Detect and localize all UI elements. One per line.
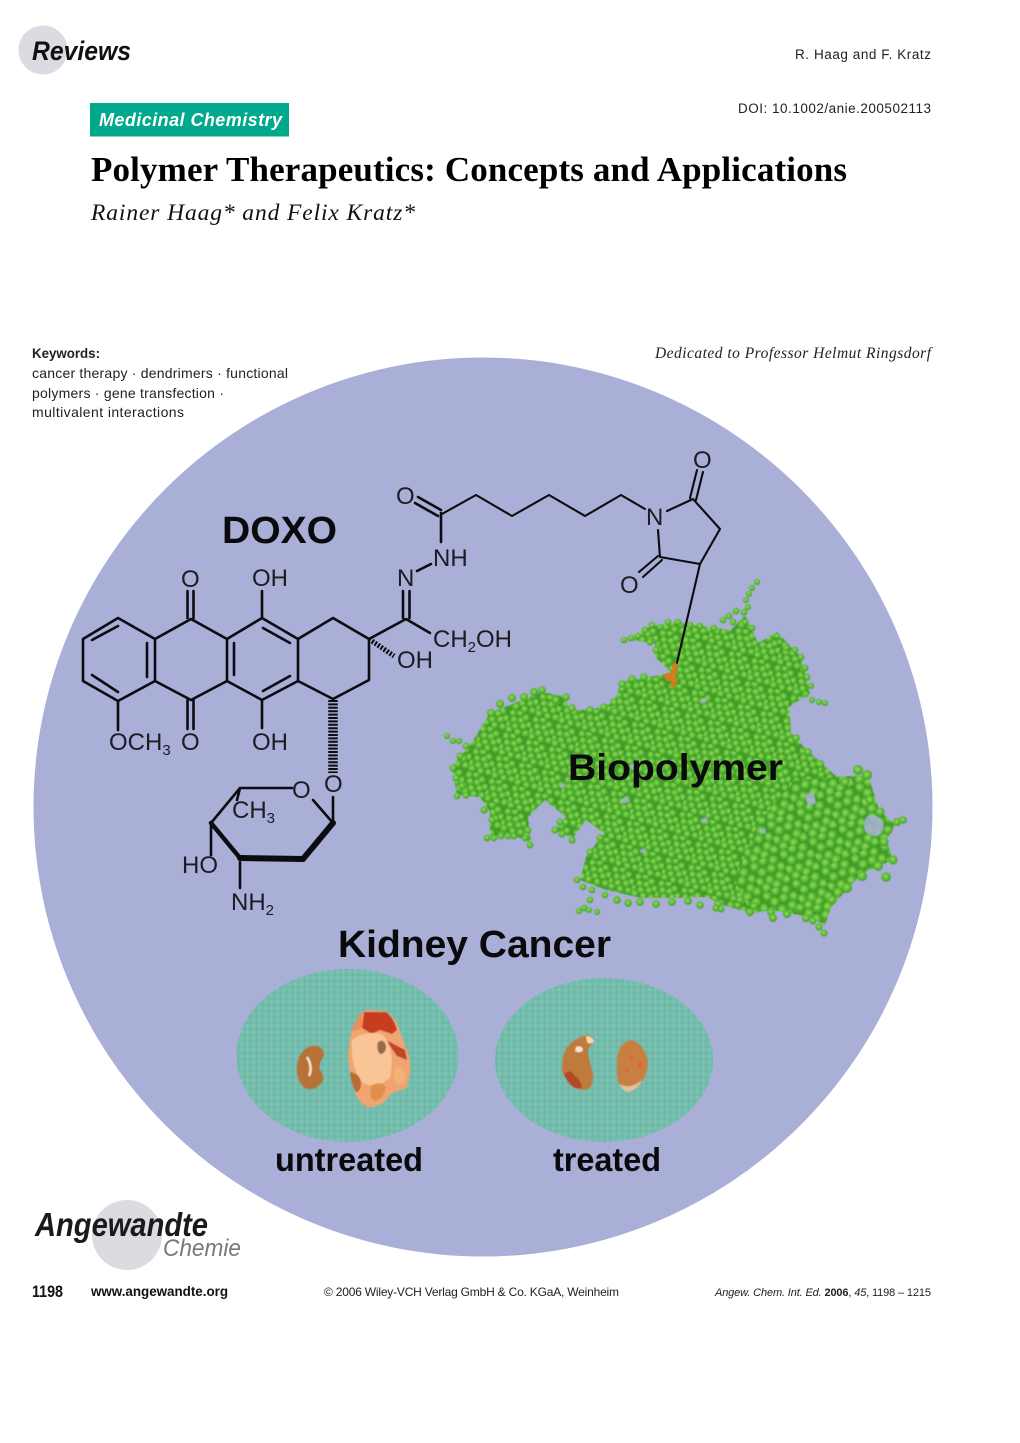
atom labels: CH	[433, 626, 468, 653]
section badge: Medicinal Chemistry: Medicinal Chemistry	[99, 110, 283, 130]
authors: Rainer Haag* and Felix Kratz*	[90, 200, 415, 226]
biopolymer sphere cluster	[444, 579, 907, 936]
logo: Reviews	[18, 26, 131, 74]
footer: citation: Angew. Chem. Int. Ed. 2006, 45, 1198 – 1215	[714, 1287, 931, 1299]
small kidney	[297, 1046, 324, 1089]
section badge: Medicinal Chemistry	[90, 103, 289, 136]
atom labels: OH	[476, 626, 512, 653]
atom labels: O	[181, 566, 200, 593]
atom labels: OH	[252, 729, 288, 756]
atom labels: OH	[397, 647, 433, 674]
gaps in cluster	[560, 698, 883, 853]
logo: Angewandte Chemie	[34, 1200, 241, 1270]
atom labels: HO	[182, 852, 218, 879]
atom labels: O	[324, 771, 343, 798]
footer: copyright: © 2006 Wiley-VCH Verlag GmbH & Co. KGaA, Weinheim	[324, 1285, 619, 1299]
logo: Angewandte Chemie: Chemie	[163, 1235, 241, 1262]
atom labels: NH	[433, 545, 468, 572]
atom labels: NH	[231, 889, 266, 916]
photo: treated kidneys	[495, 978, 713, 1142]
atom labels: O	[181, 729, 200, 756]
DOI: DOI: 10.1002/anie.200502113	[738, 101, 931, 116]
footer: page number: 1198	[32, 1282, 63, 1301]
linker chain bonds	[442, 470, 720, 667]
atom labels: CH	[232, 797, 267, 824]
running head: authors: R. Haag and F. Kratz	[795, 47, 931, 62]
label: treated: treated	[553, 1141, 661, 1178]
atom labels: N	[397, 565, 414, 592]
label: Biopolymer: Biopolymer	[568, 747, 783, 788]
loose spheres along the edge	[444, 579, 907, 936]
hashed bonds	[328, 700, 338, 773]
keywords: Keywords:	[32, 345, 100, 361]
keywords: polymers · gene transfection ·	[32, 385, 224, 401]
atom labels: 2	[266, 902, 274, 919]
tumour kidney	[348, 1010, 410, 1107]
graphic: purple circle	[34, 358, 932, 1256]
atom labels: OCH	[109, 729, 162, 756]
atom labels	[109, 447, 712, 919]
photo: untreated kidneys	[236, 969, 458, 1142]
sugar ring	[211, 788, 333, 888]
atom labels: O	[292, 777, 311, 804]
atom labels: 3	[267, 810, 275, 827]
atom labels: O	[396, 483, 415, 510]
dedication: Dedicated to Professor Helmut Ringsdorf	[654, 345, 934, 362]
atom labels: O	[620, 572, 639, 599]
keywords: cancer therapy · dendrimers · functional	[32, 365, 288, 381]
label: DOXO: DOXO	[222, 510, 337, 552]
keywords: multivalent interactions	[32, 404, 184, 420]
atom labels: N	[646, 504, 663, 531]
label: untreated: untreated	[275, 1141, 423, 1178]
label: Kidney Cancer: Kidney Cancer	[338, 924, 611, 966]
molecule: DOXO with maleimide linker	[83, 447, 720, 919]
logo: Reviews: Reviews	[32, 36, 131, 66]
tetracycle bonds	[83, 497, 441, 730]
atom labels: 2	[468, 639, 476, 656]
orange attachment residue	[664, 663, 678, 688]
atom labels: 3	[162, 742, 171, 759]
title: Polymer Therapeutics: Concepts and Applications	[91, 150, 847, 189]
logo: Angewandte Chemie: Angewandte	[34, 1206, 208, 1243]
keywords	[32, 345, 288, 420]
atom labels: O	[693, 447, 712, 474]
atom labels: OH	[252, 565, 288, 592]
footer: website: www.angewandte.org	[90, 1283, 228, 1299]
